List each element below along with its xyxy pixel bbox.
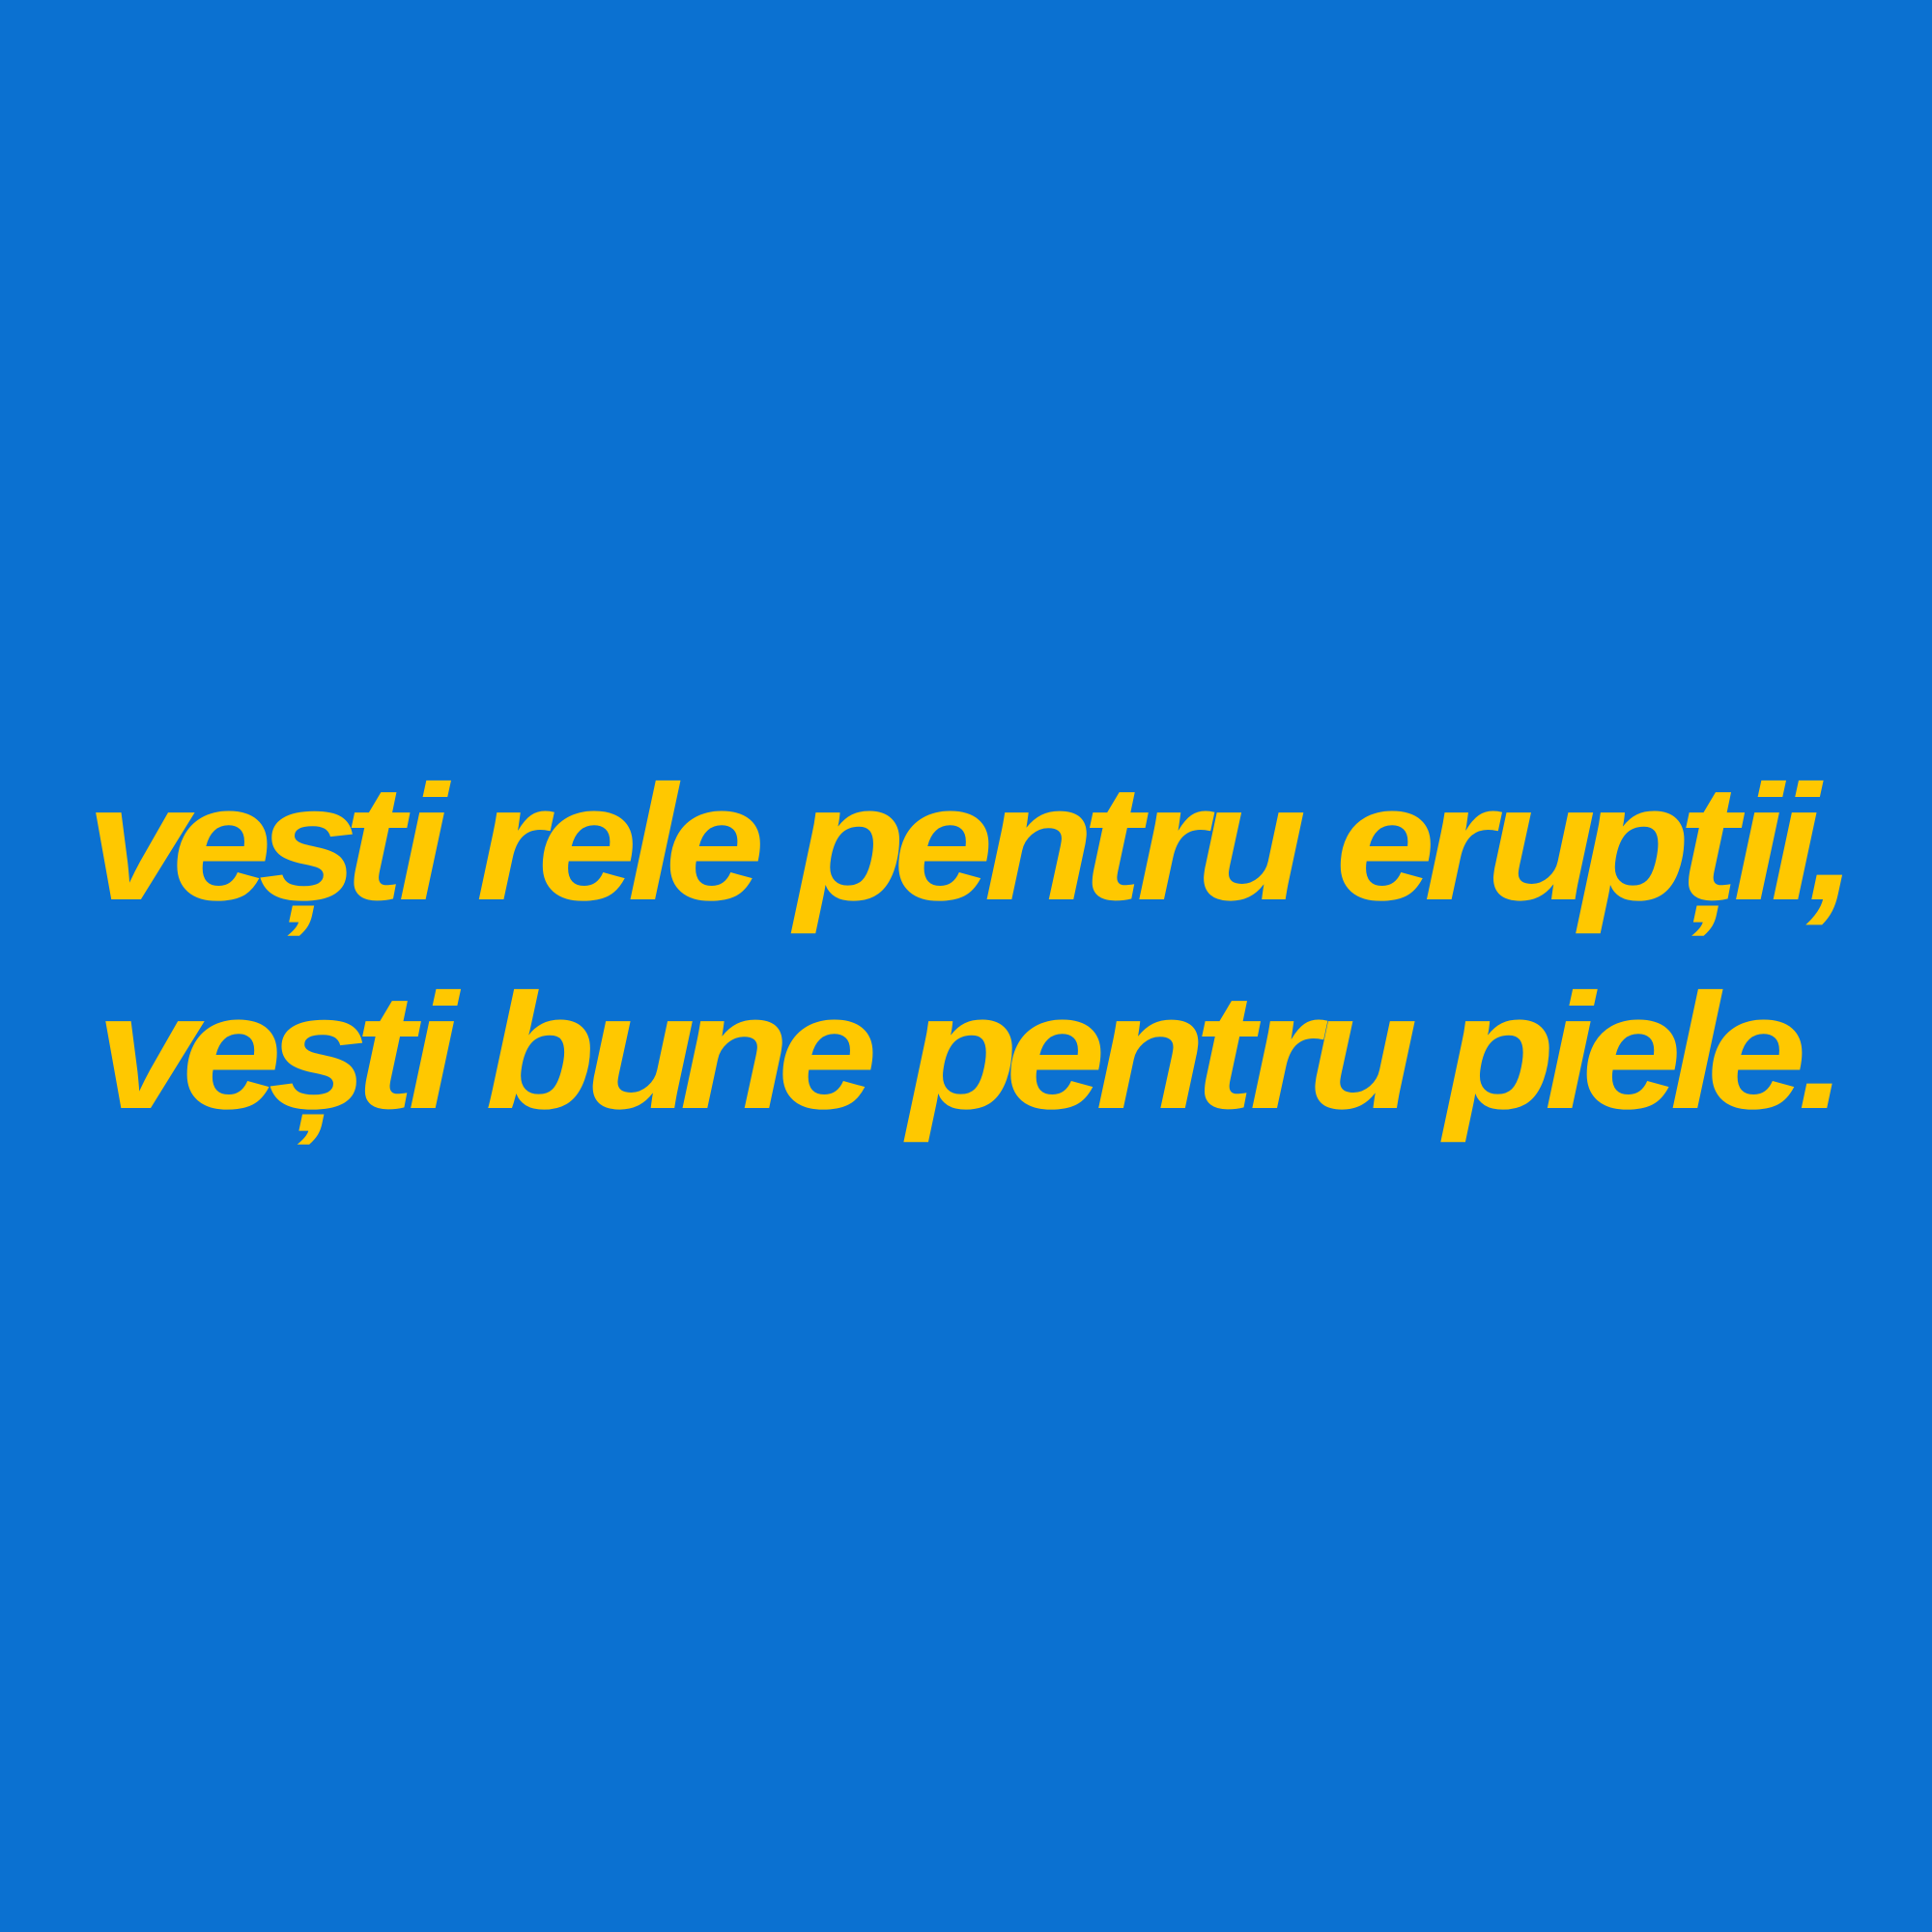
heading: line 1: rele	[476, 751, 765, 934]
heading: line 1: erupții,	[1335, 751, 1858, 936]
heading: line 1: pentru	[791, 751, 1307, 934]
heading: line 2: pentru	[903, 959, 1418, 1143]
heading: line 2: vești	[96, 959, 461, 1145]
heading: line 1	[86, 751, 1858, 936]
heading: line 2: piele.	[1440, 959, 1848, 1143]
heading: line 2: bune	[485, 959, 878, 1143]
heading: line 1: vești	[86, 751, 451, 936]
heading: line 2	[96, 959, 1848, 1145]
